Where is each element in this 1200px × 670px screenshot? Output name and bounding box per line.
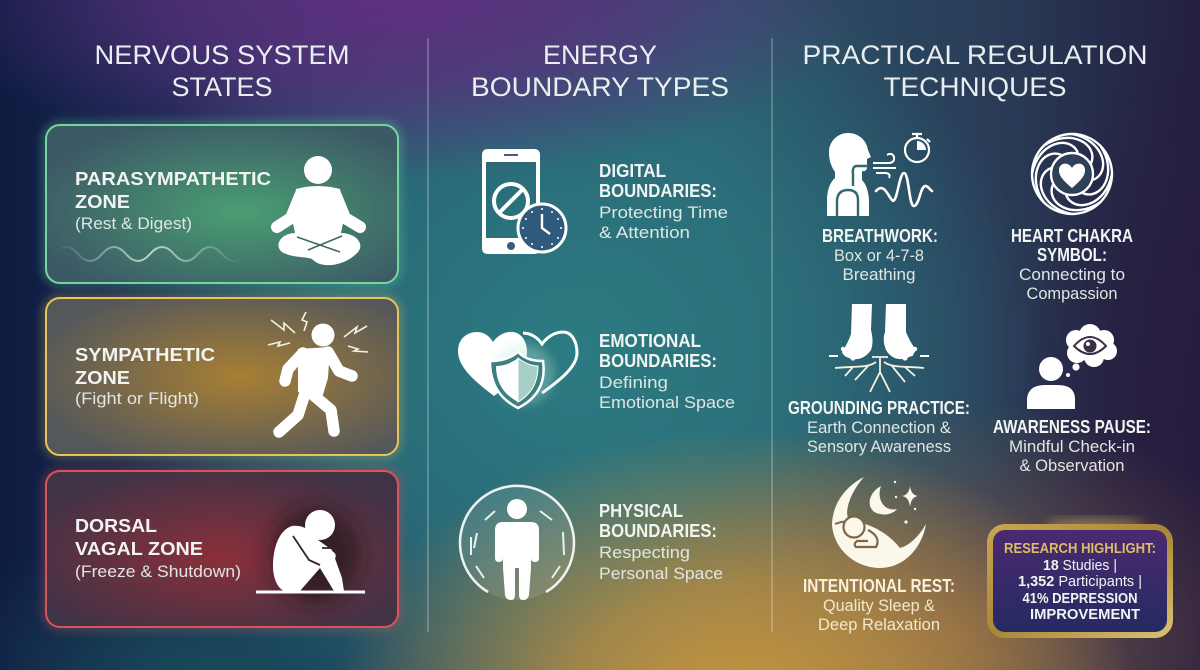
heart chakra text: SYMBOL: bbox=[1037, 245, 1107, 265]
icon: person in bubble bbox=[459, 484, 575, 600]
grounding text bbox=[788, 398, 970, 456]
heart chakra text: Connecting to bbox=[1019, 266, 1125, 284]
breathwork text bbox=[822, 226, 938, 284]
physical boundaries text: BOUNDARIES: bbox=[599, 521, 717, 541]
dorsal vagal label bbox=[75, 516, 241, 581]
grounding text: Earth Connection & bbox=[807, 419, 951, 437]
icon: phone with clock bbox=[482, 149, 566, 254]
parasympathetic label: ZONE bbox=[75, 192, 130, 212]
callout: research highlight: RESEARCH HIGHLIGHT: bbox=[1004, 541, 1156, 557]
sympathetic label bbox=[75, 345, 215, 408]
physical boundaries text: Respecting bbox=[599, 544, 690, 562]
sympathetic label: (Fight or Flight) bbox=[75, 390, 199, 408]
sympathetic label: ZONE bbox=[75, 368, 130, 388]
callout: research highlight: 18 Studies | bbox=[1043, 558, 1117, 574]
digital boundaries text: & Attention bbox=[599, 224, 690, 242]
intentional rest text: Deep Relaxation bbox=[818, 616, 940, 634]
digital boundaries text: BOUNDARIES: bbox=[599, 181, 717, 201]
awareness text: Mindful Check-in bbox=[1009, 438, 1135, 456]
block: heart chakra symbol bbox=[1011, 124, 1133, 303]
parasympathetic label: (Rest & Digest) bbox=[75, 215, 192, 233]
parasympathetic label: PARASYMPATHETIC bbox=[75, 169, 271, 189]
sympathetic label: SYMPATHETIC bbox=[75, 345, 215, 365]
awareness text bbox=[993, 417, 1151, 475]
breathwork text: Breathing bbox=[842, 266, 916, 284]
heading: energy boundary types: ENERGY bbox=[543, 40, 657, 70]
breathwork text: Box or 4-7-8 bbox=[834, 247, 924, 265]
icon: person with thought cloud eye bbox=[1027, 324, 1117, 409]
heading: nervous system states: NERVOUS SYSTEM bbox=[94, 40, 350, 70]
block: emotional boundaries bbox=[458, 331, 735, 412]
dorsal vagal label: DORSAL bbox=[75, 516, 157, 536]
callout: research highlight: IMPROVEMENT bbox=[1030, 607, 1140, 623]
physical boundaries text: PHYSICAL bbox=[599, 501, 683, 521]
heading: energy boundary types bbox=[471, 40, 729, 102]
icon: feet with roots bbox=[829, 304, 929, 392]
emotional boundaries text: Emotional Space bbox=[599, 394, 735, 412]
digital boundaries text: Protecting Time bbox=[599, 204, 728, 222]
heart chakra text bbox=[1011, 226, 1133, 303]
awareness text: & Observation bbox=[1020, 457, 1124, 475]
block: intentional rest bbox=[803, 477, 955, 634]
icon: crescent moon and sleeper bbox=[832, 477, 926, 568]
dark halo behind figure bbox=[271, 507, 359, 603]
heading: practical regulation techniques bbox=[802, 40, 1148, 102]
digital boundaries text bbox=[599, 161, 728, 242]
panel: dorsal vagal zone bbox=[46, 471, 398, 627]
heading: practical regulation techniques: TECHNIQUES bbox=[884, 72, 1066, 102]
callout: research highlight bbox=[990, 518, 1170, 635]
block: awareness pause bbox=[993, 324, 1151, 475]
callout: research highlight: 41% DEPRESSION bbox=[1022, 591, 1138, 607]
intentional rest text: INTENTIONAL REST: bbox=[803, 576, 955, 596]
heading: practical regulation techniques: PRACTICAL REGULATION bbox=[802, 40, 1148, 70]
icon: chakra swirl with heart bbox=[1022, 124, 1122, 224]
grounding text: Sensory Awareness bbox=[807, 438, 951, 456]
heading: nervous system states bbox=[94, 40, 350, 102]
physical boundaries text bbox=[599, 501, 723, 583]
heart chakra text: HEART CHAKRA bbox=[1011, 226, 1133, 246]
intentional rest text bbox=[803, 576, 955, 634]
icon: breathing head and lungs bbox=[827, 133, 932, 216]
block: breathwork bbox=[822, 133, 938, 284]
panel: sympathetic zone bbox=[46, 298, 398, 455]
icon: running stressed person bbox=[268, 312, 368, 432]
icon: hearts and shield bbox=[458, 332, 577, 408]
dorsal vagal label: (Freeze & Shutdown) bbox=[75, 563, 241, 581]
heading: energy boundary types: BOUNDARY TYPES bbox=[471, 72, 729, 102]
intentional rest text: Quality Sleep & bbox=[823, 597, 935, 615]
block: digital boundaries bbox=[482, 149, 728, 254]
wave line bbox=[54, 247, 246, 261]
emotional boundaries text bbox=[599, 331, 735, 412]
physical boundaries text: Personal Space bbox=[599, 565, 723, 583]
divider lines bbox=[428, 38, 772, 632]
dorsal vagal label: VAGAL ZONE bbox=[75, 539, 203, 559]
callout: research highlight: 1,352 Participants | bbox=[1018, 574, 1142, 590]
block: physical boundaries bbox=[459, 484, 723, 600]
panel: parasympathetic zone bbox=[46, 125, 398, 283]
awareness text: AWARENESS PAUSE: bbox=[993, 417, 1151, 437]
block: grounding practice bbox=[788, 304, 970, 456]
heading: nervous system states: STATES bbox=[172, 72, 272, 102]
icon: person curled up bbox=[256, 510, 365, 592]
emotional boundaries text: BOUNDARIES: bbox=[599, 351, 717, 371]
grounding text: GROUNDING PRACTICE: bbox=[788, 398, 970, 418]
heart chakra text: Compassion bbox=[1026, 285, 1118, 303]
emotional boundaries text: Defining bbox=[599, 374, 668, 392]
parasympathetic label bbox=[75, 169, 271, 233]
emotional boundaries text: EMOTIONAL bbox=[599, 331, 701, 351]
icon: meditating person bbox=[277, 156, 360, 265]
breathwork text: BREATHWORK: bbox=[822, 226, 938, 246]
digital boundaries text: DIGITAL bbox=[599, 161, 666, 181]
